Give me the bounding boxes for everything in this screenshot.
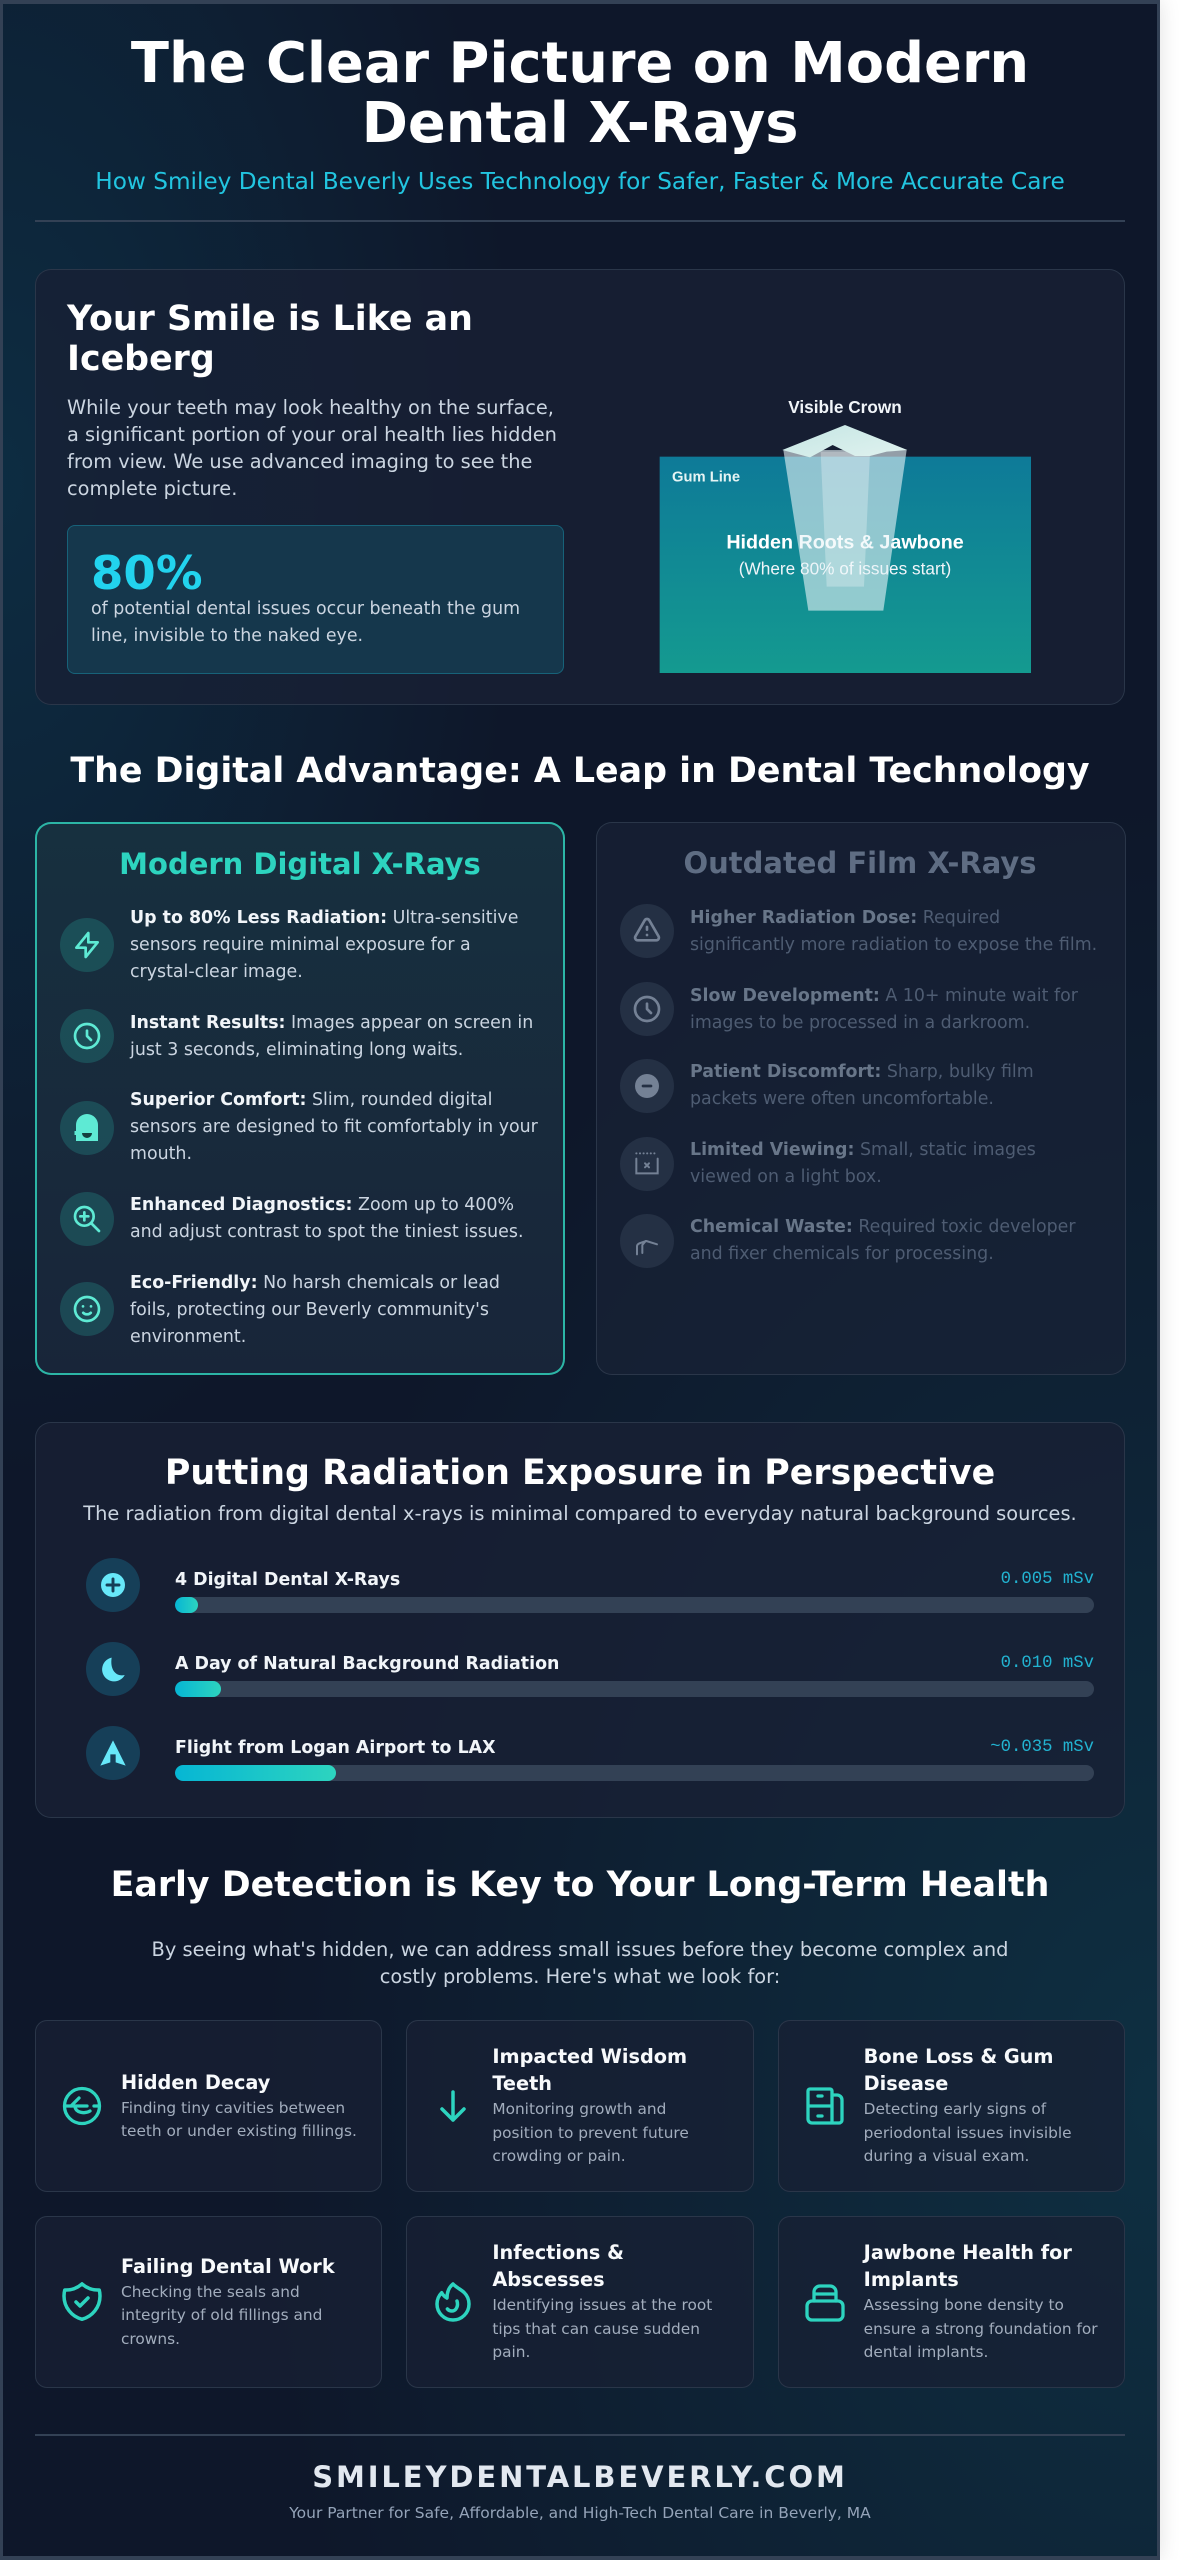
- item: eco friendly: environment.: [130, 1327, 246, 1347]
- card: bone loss: Detecting early signs of: [864, 2100, 1046, 2118]
- card: bone loss: Disease: [864, 2072, 948, 2095]
- item: less radiation: sensors require minimal exposure for a: [130, 935, 471, 955]
- card: impacted wisdom teeth: [406, 2020, 754, 2192]
- heading: your smile is like an iceberg: Your Smile is Like an: [67, 299, 473, 339]
- item: superior comfort: Superior Comfort: Slim, rounded digital: [130, 1090, 493, 1110]
- item: instant results: just 3 seconds, eliminating long waits.: [130, 1040, 463, 1060]
- card: jawbone health: Jawbone Health for: [864, 2241, 1072, 2264]
- card: failing dental work: Checking the seals and: [121, 2283, 300, 2301]
- card: infections: tips that can cause sudden: [492, 2320, 700, 2338]
- icon: sensor: [60, 1101, 114, 1155]
- card: jawbone health: [778, 2216, 1125, 2388]
- icon: plus circle: [86, 1558, 140, 1612]
- stat description: of potential dental issues occur beneath the gum: [91, 599, 520, 619]
- card: jawbone health: Implants: [864, 2268, 959, 2291]
- footer: website: SMILEYDENTALBEVERLY.COM: [312, 2460, 848, 2494]
- card: impacted wisdom teeth: Monitoring growth and: [492, 2100, 666, 2118]
- item: limited viewing: [620, 1137, 1036, 1191]
- card: hidden decay: [35, 2020, 382, 2192]
- heading: early detection: Early Detection is Key to Your Long-Term Health: [111, 1865, 1049, 1905]
- text block: early detection intro: [152, 1938, 1008, 1988]
- card: bone loss: periodontal issues invisible: [864, 2124, 1072, 2142]
- item: patient discomfort: [620, 1059, 1034, 1113]
- item: less radiation: [60, 908, 518, 982]
- card: bone loss: [778, 2020, 1125, 2192]
- heading: outdated film x-rays: Outdated Film X-Rays: [683, 846, 1037, 880]
- item: chemical waste: and fixer chemicals for processing.: [690, 1244, 994, 1264]
- subtitle: How Smiley Dental Beverly Uses Technology for Safer, Faster & More Accurate Care: [95, 168, 1065, 195]
- text block: iceberg description: [67, 396, 557, 500]
- bar: natural background: [86, 1642, 1094, 1697]
- icon: moon: [86, 1642, 140, 1696]
- title: Dental X-Rays: [362, 91, 798, 156]
- card: failing dental work: crowns.: [121, 2330, 180, 2348]
- item: eco friendly: [60, 1273, 500, 1347]
- text block: iceberg description: While your teeth may look healthy on the surface,: [67, 396, 554, 419]
- text block: radiation intro: The radiation from digital dental x-rays is minimal compared to everyday natural background sources.: [83, 1502, 1077, 1525]
- text block: early detection intro: costly problems. Here's what we look for:: [380, 1965, 780, 1988]
- text block: iceberg description: from view. We use advanced imaging to see the: [67, 450, 532, 473]
- item: chemical waste: Chemical Waste: Required toxic developer: [690, 1217, 1075, 1237]
- text block: iceberg description: complete picture.: [67, 477, 237, 500]
- icon: film box: [620, 1136, 674, 1190]
- heading: your smile is like an iceberg: Iceberg: [67, 339, 215, 379]
- card: jawbone health: Assessing bone density to: [864, 2296, 1064, 2314]
- panel: modern digital x-rays: [35, 822, 565, 1375]
- item: enhanced diagnostics: [60, 1192, 523, 1246]
- footer: tagline: Your Partner for Safe, Affordable, and High-Tech Dental Care in Beverly, MA: [289, 2504, 871, 2522]
- icon: zoom in: [60, 1192, 114, 1246]
- icon: smile: [60, 1282, 114, 1336]
- card: failing dental work: [35, 2216, 382, 2388]
- item: slow development: Slow Development: A 10+ minute wait for: [690, 986, 1078, 1006]
- icon: warning: [620, 904, 674, 958]
- icon: chemical drip: [620, 1214, 674, 1268]
- item: patient discomfort: packets were often uncomfortable.: [690, 1089, 994, 1109]
- item: superior comfort: mouth.: [130, 1144, 192, 1164]
- icon: clock: [620, 982, 674, 1036]
- icon: minus circle: [620, 1059, 674, 1113]
- bar: digital x-rays: 0.005 mSv: [1001, 1570, 1094, 1589]
- card: infections: Abscesses: [492, 2268, 605, 2291]
- bar: digital x-rays: 4 Digital Dental X-Rays: [175, 1570, 400, 1590]
- panel: radiation exposure: [35, 1422, 1125, 1818]
- item: superior comfort: sensors are designed to fit comfortably in your: [130, 1117, 538, 1137]
- item: less radiation: crystal-clear image.: [130, 962, 303, 982]
- heading: modern digital x-rays: Modern Digital X-Rays: [119, 847, 481, 881]
- card: jawbone health: dental implants.: [864, 2343, 988, 2361]
- chart: tooth iceberg diagram: (Where 80% of issues start): [739, 558, 951, 578]
- card: hidden decay: Hidden Decay: [121, 2071, 270, 2094]
- item: higher dose: [620, 904, 1097, 958]
- item: chemical waste: [620, 1214, 1076, 1268]
- item: eco friendly: foils, protecting our Beverly community's: [130, 1300, 489, 1320]
- item: patient discomfort: Patient Discomfort: Sharp, bulky film: [690, 1062, 1034, 1082]
- chart: tooth iceberg diagram: Visible Crown: [788, 397, 902, 417]
- chart: tooth iceberg diagram: Hidden Roots & Jawbone: [726, 532, 964, 554]
- item: slow development: images to be processed in a darkroom.: [690, 1012, 1030, 1032]
- icon: plane: [86, 1726, 140, 1780]
- item: instant results: [60, 1009, 533, 1063]
- card: infections: Infections &: [492, 2241, 624, 2264]
- item: limited viewing: viewed on a light box.: [690, 1166, 882, 1186]
- item: instant results: Instant Results: Images appear on screen in: [130, 1013, 533, 1033]
- heading: radiation exposure: Putting Radiation Exposure in Perspective: [165, 1453, 995, 1493]
- card: infections: pain.: [492, 2343, 530, 2361]
- item: enhanced diagnostics: and adjust contrast to spot the tiniest issues.: [130, 1222, 523, 1242]
- panel: iceberg: [35, 269, 1125, 705]
- card: failing dental work: Failing Dental Work: [121, 2255, 335, 2278]
- item: eco friendly: Eco-Friendly: No harsh chemicals or lead: [130, 1273, 500, 1293]
- card: impacted wisdom teeth: position to prevent future: [492, 2124, 689, 2142]
- card: bone loss: Bone Loss & Gum: [864, 2045, 1053, 2068]
- card: failing dental work: integrity of old fillings and: [121, 2306, 322, 2324]
- title: [131, 31, 1029, 156]
- heading: your smile is like an iceberg: [66, 299, 473, 379]
- card: jawbone health: ensure a strong foundation for: [864, 2320, 1098, 2338]
- stat description: line, invisible to the naked eye.: [91, 626, 363, 646]
- item: higher dose: Higher Radiation Dose: Required: [690, 908, 1000, 928]
- item: limited viewing: Limited Viewing: Small, static images: [690, 1140, 1036, 1160]
- icon: clock: [60, 1009, 114, 1063]
- card: hidden decay: Finding tiny cavities between: [121, 2099, 345, 2117]
- callout: 80 percent stat: [67, 525, 564, 674]
- item: slow development: [620, 982, 1078, 1036]
- bar: digital x-rays: [86, 1558, 1094, 1613]
- bar: natural background: 0.010 mSv: [1001, 1654, 1094, 1673]
- card: infections: Identifying issues at the root: [492, 2296, 712, 2314]
- item: less radiation: Up to 80% Less Radiation: Ultra-sensitive: [130, 908, 518, 928]
- card: impacted wisdom teeth: Impacted Wisdom: [492, 2045, 687, 2068]
- panel: outdated film x-rays: [596, 822, 1126, 1375]
- stat description: [91, 599, 520, 646]
- stat number: 80%: [91, 546, 203, 600]
- bar: natural background: A Day of Natural Background Radiation: [175, 1654, 559, 1674]
- card: hidden decay: teeth or under existing fillings.: [121, 2122, 357, 2140]
- item: higher dose: significantly more radiation to expose the film.: [690, 935, 1097, 955]
- chart: tooth iceberg diagram: [660, 397, 1031, 673]
- text block: early detection intro: By seeing what's hidden, we can address small issues before they become complex and: [152, 1938, 1008, 1961]
- card: impacted wisdom teeth: Teeth: [492, 2072, 552, 2095]
- card: impacted wisdom teeth: crowding or pain.: [492, 2147, 626, 2165]
- item: enhanced diagnostics: Enhanced Diagnostics: Zoom up to 400%: [130, 1195, 514, 1215]
- item: superior comfort: [60, 1090, 538, 1164]
- bar: flight: ~0.035 mSv: [990, 1738, 1094, 1757]
- chart: tooth iceberg diagram: Gum Line: [672, 470, 740, 486]
- bar: flight: Flight from Logan Airport to LAX: [175, 1738, 496, 1758]
- title: The Clear Picture on Modern: [131, 31, 1029, 96]
- bar: flight: [86, 1726, 1094, 1781]
- heading: digital advantage: The Digital Advantage: A Leap in Dental Technology: [70, 751, 1090, 791]
- card: infections: [406, 2216, 754, 2388]
- text block: iceberg description: a significant portion of your oral health lies hidden: [67, 423, 557, 446]
- icon: bolt: [60, 918, 114, 972]
- card: bone loss: during a visual exam.: [864, 2147, 1029, 2165]
